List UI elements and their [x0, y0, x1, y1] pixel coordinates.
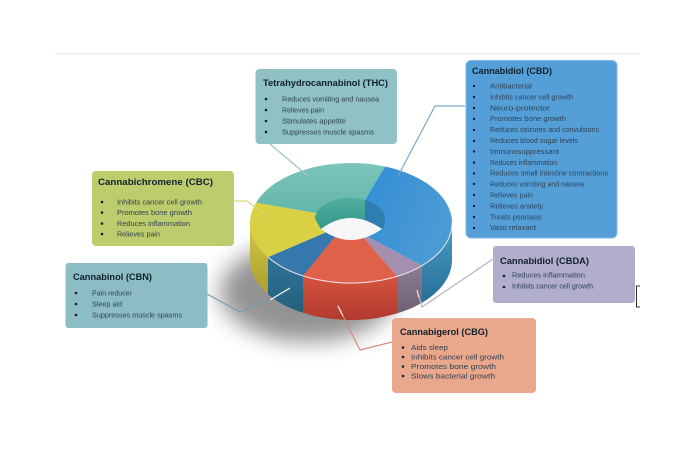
panel box [493, 246, 635, 303]
connector: CBG on chart [338, 306, 343, 316]
outer wall: CBD blue [422, 223, 452, 303]
outer wall: yellow [250, 223, 268, 294]
panel: CBG [392, 318, 536, 393]
heading: Cannabinol (CBN) [73, 272, 152, 282]
list: Stimulates appetite [282, 116, 346, 126]
list: Reduces seizures and convulsions [490, 125, 599, 134]
list: Aids sleep [411, 343, 448, 352]
outer wall: CBN blue [268, 257, 303, 313]
list: Vaso relaxant [490, 223, 537, 232]
panel: CBN [66, 263, 208, 328]
panel: CBC [92, 171, 234, 246]
slice: CBD blue [350, 166, 452, 266]
list: Inhibits cancer cell growth [512, 282, 593, 290]
list: Relieves anxiety [490, 201, 543, 210]
list [75, 288, 182, 320]
list: Inhibits cancer cell growth [117, 198, 202, 206]
list [265, 94, 380, 136]
list: Relieves pain [490, 190, 533, 200]
list: Promotes bone growth [117, 208, 192, 217]
list [473, 82, 608, 232]
panel box [392, 318, 536, 393]
list: Slows bacterial growth [411, 372, 495, 380]
list: Sleep aid [92, 300, 122, 308]
list: Suppresses muscle spasms [92, 310, 182, 320]
panel: CBD [466, 60, 617, 238]
heading: Cannabigerol (CBG) [400, 327, 488, 337]
panel box [66, 263, 208, 328]
heading: Cannabichromene (CBC) [98, 177, 213, 187]
top divider rule [55, 53, 640, 55]
panel box [256, 69, 397, 144]
connector: CBN [207, 294, 270, 312]
list: Relieves pain [117, 230, 160, 238]
slice: CBG red [303, 222, 397, 283]
slice: CBN blue [268, 222, 350, 276]
connector: CBDA on chart [417, 290, 419, 298]
list: Relieves pain [282, 106, 324, 114]
hole opening [321, 218, 382, 240]
selection bracket at right edge [636, 286, 640, 307]
connector: CBC [234, 201, 270, 218]
hole back wall: blue [365, 200, 385, 232]
list: Inhibits cancer cell growth [490, 92, 573, 101]
slice: THC teal [256, 163, 385, 222]
list: Treats psoriasis [490, 212, 542, 221]
list: Reduces blood sugar levels [490, 136, 578, 145]
list: Promotes bone growth [411, 362, 496, 371]
list: Inhibits cancer cell growth [411, 352, 504, 362]
connector: THC [270, 144, 308, 176]
panel box [466, 60, 617, 238]
panel: THC [256, 69, 397, 144]
outer wall: CBDA purple [397, 266, 422, 313]
panel box [92, 171, 234, 246]
connector: CBG [338, 306, 392, 350]
hole back wall: teal [315, 198, 365, 232]
list [503, 270, 593, 290]
list: Suppresses muscle spasms [282, 128, 374, 136]
slice: CBDA purple [350, 222, 422, 276]
list [402, 343, 504, 380]
list: Reduces inflammation [117, 219, 190, 228]
front rim highlight [268, 223, 452, 283]
connector: CBD [398, 106, 465, 176]
list: Promotes bone growth [490, 114, 566, 123]
panel: CBDA [493, 246, 635, 303]
list: Reduces small intestine contractions [490, 169, 608, 178]
list: Neuro-protector [490, 103, 551, 112]
list: Reduces vomiting and nausea [490, 180, 585, 189]
list: Immunosuppressant [490, 147, 560, 156]
outer wall: CBG red [303, 276, 397, 320]
heading: Cannabidiol (CBD) [472, 66, 552, 76]
heading: Tetrahydrocannabinol (THC) [263, 78, 388, 88]
list: Pain reducer [92, 288, 132, 298]
list: Reduces inflammation [512, 270, 585, 280]
chart drop shadow [220, 242, 396, 342]
list: Reduces vomiting and nausea [282, 94, 380, 104]
slice: CBC yellow [250, 203, 350, 257]
donut chart [220, 163, 452, 342]
list: Antibacterial [490, 82, 532, 90]
list: Reduces inflammation [490, 158, 557, 167]
connector: CBN on chart [270, 288, 290, 300]
connector: CBDA [417, 259, 493, 307]
heading: Cannabidiol (CBDA) [500, 256, 589, 266]
list [101, 198, 202, 238]
